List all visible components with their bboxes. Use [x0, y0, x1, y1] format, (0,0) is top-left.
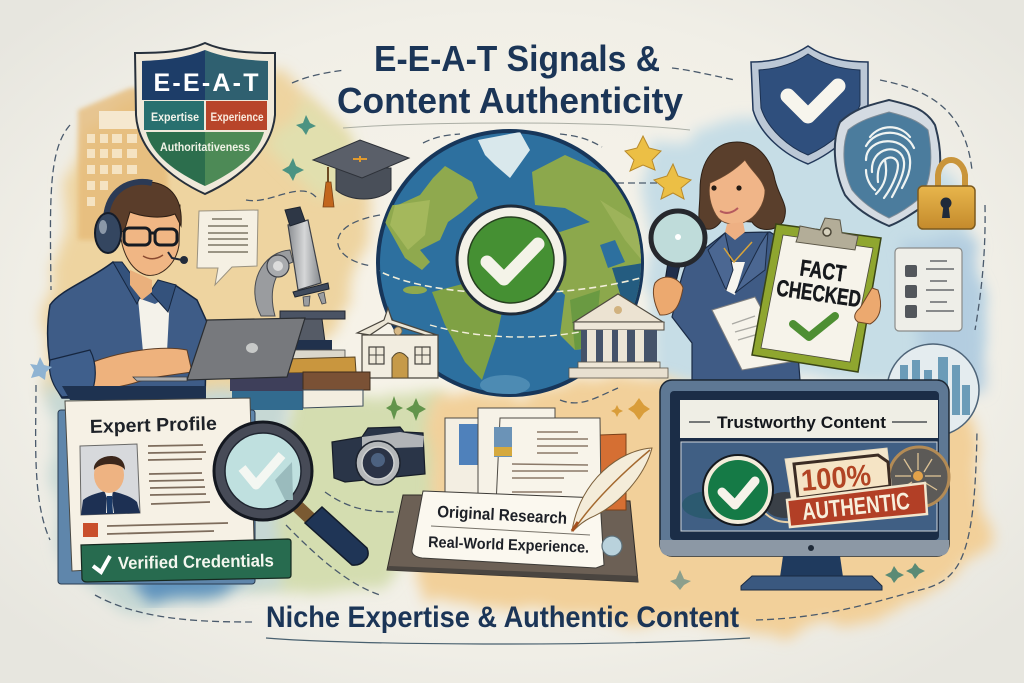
computer monitor: [660, 380, 949, 590]
title: [337, 38, 683, 121]
person with headset at laptop: [48, 181, 207, 400]
circular data chart: [887, 344, 979, 436]
E-E-A-T shield badge: [135, 43, 275, 194]
shield heading: E-E-A-T: [154, 69, 258, 97]
coin seal: [602, 536, 622, 556]
fingerprint shield: [835, 100, 940, 226]
small stars left: [282, 115, 316, 181]
clipboard text: FACT: [798, 255, 848, 287]
paper sheet: [712, 297, 790, 370]
authoritativeness label: Authoritativeness: [160, 140, 250, 154]
face: [120, 205, 180, 275]
forearm: [93, 348, 192, 388]
title: E-E-A-T Signals &: [374, 38, 660, 79]
bank building: [569, 294, 668, 378]
north america: [378, 166, 478, 270]
original research card: Real-World Experience.: [428, 534, 589, 557]
stars: [625, 136, 691, 199]
padlock: [918, 160, 975, 229]
hair: [104, 181, 181, 232]
profile photo: [80, 444, 140, 515]
authentic check badge: [703, 455, 800, 525]
verified credentials banner: Verified Credentials: [118, 550, 274, 573]
shirt: [48, 262, 207, 398]
blazer: [672, 232, 800, 380]
speech bubble: [197, 210, 258, 285]
title: Content Authenticity: [337, 80, 683, 121]
subtitle: Niche Expertise & Authentic Content: [266, 601, 739, 634]
face: [709, 160, 765, 224]
trustworthy heading strip: Trustworthy Content: [717, 413, 886, 432]
globe check badge: [457, 206, 565, 314]
quill feather: [572, 448, 652, 531]
experience label: Experience: [210, 110, 264, 124]
original research card: Original Research: [437, 503, 568, 528]
laptop: [133, 318, 305, 381]
100% authentic stamp: [785, 448, 927, 527]
clipboard text: CHECKED: [775, 274, 863, 312]
original research card: [412, 491, 604, 568]
camera: [332, 427, 425, 485]
neck: [130, 270, 152, 300]
verified credentials banner: [81, 539, 291, 582]
watercolor wash: [45, 72, 985, 630]
small stars centre: [386, 396, 426, 421]
dashed connector lines: [36, 68, 985, 622]
headphones: [106, 182, 152, 218]
stack of books: [230, 340, 370, 410]
woman fact checker: [672, 142, 800, 380]
subtitle underline: [266, 638, 750, 644]
ice caps: [478, 132, 530, 178]
navy check shield: [751, 46, 868, 164]
research documents: [387, 408, 638, 582]
handheld magnifier: [651, 211, 705, 315]
clipboard fact checked: [752, 218, 881, 372]
screen panel: [681, 442, 937, 531]
graduation cap: [313, 140, 409, 207]
trustworthy heading strip: [680, 400, 938, 438]
checklist card: [895, 248, 962, 331]
microscope: [255, 207, 345, 342]
100% authentic stamp: 100%: [800, 459, 872, 498]
dial emblem: [889, 447, 949, 507]
card heading: Expert Profile: [90, 414, 217, 438]
europe africa asia: [530, 155, 650, 350]
hair: [699, 142, 785, 230]
glasses: [124, 228, 177, 245]
house: [357, 308, 438, 378]
expertise label: Expertise: [151, 110, 199, 124]
globe: [373, 131, 650, 395]
100% authentic stamp: AUTHENTIC: [801, 488, 911, 526]
decorative stars lower: [30, 357, 925, 590]
south america: [432, 282, 505, 380]
magnifying glass: [214, 422, 368, 565]
profile text lines: [107, 445, 228, 534]
clipboard text: [775, 252, 866, 312]
faint building backdrop: [78, 88, 170, 240]
expert profile card: [58, 398, 256, 584]
